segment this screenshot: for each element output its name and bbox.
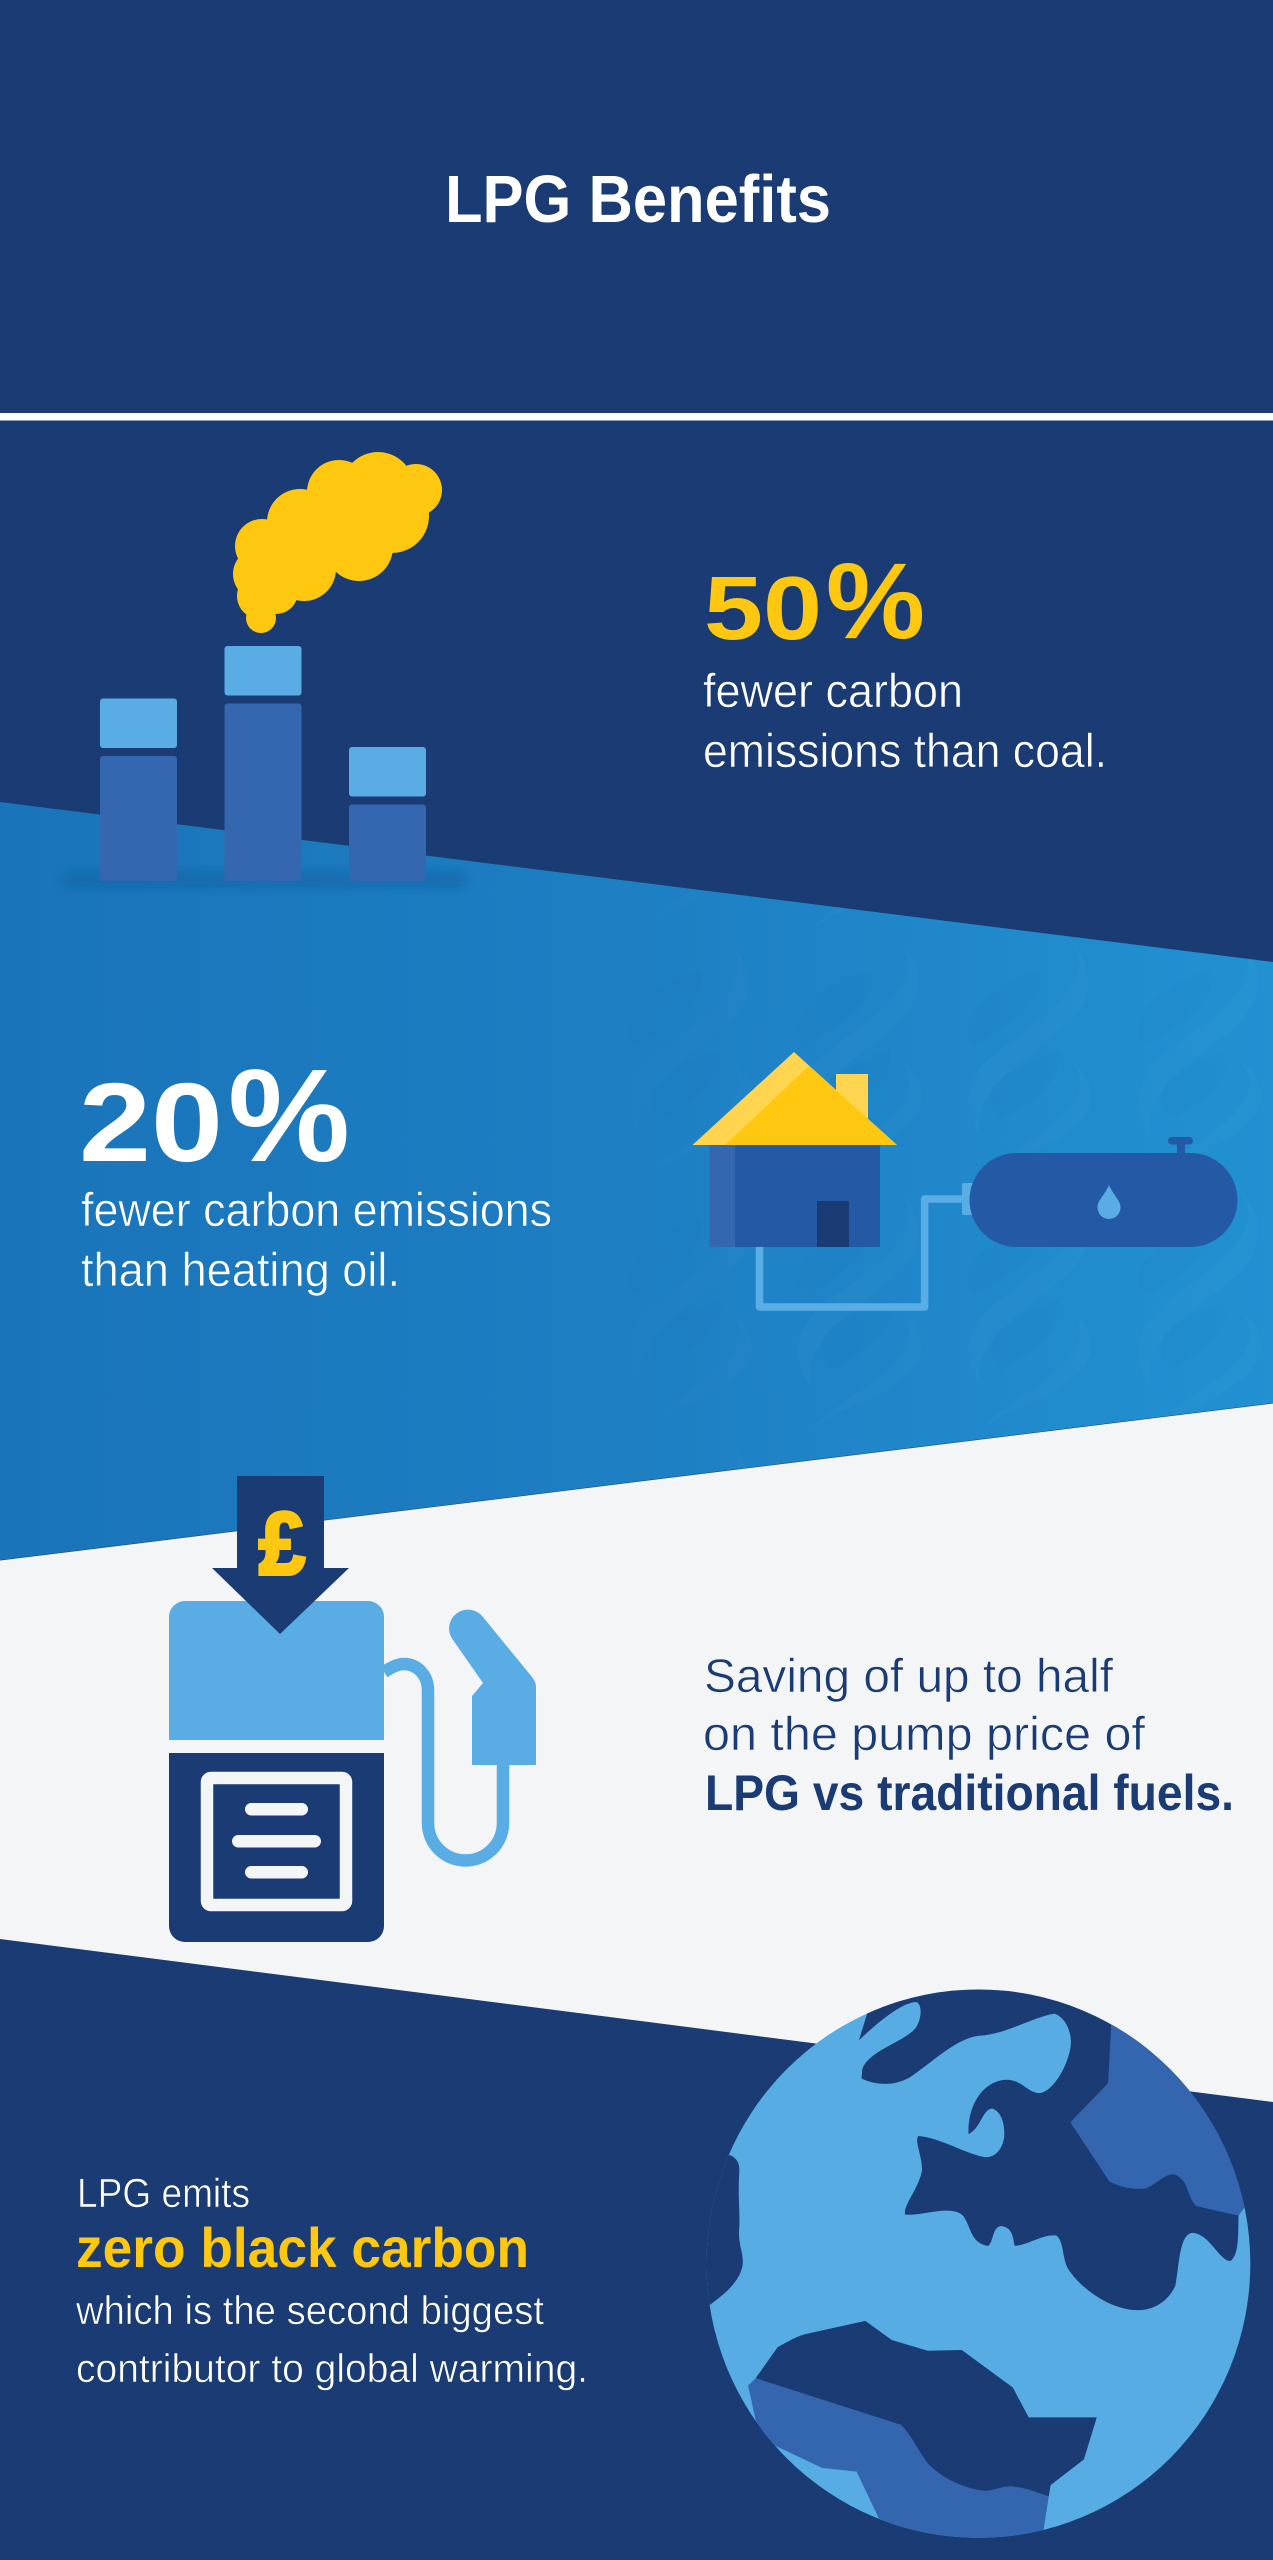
pipe bbox=[760, 1199, 967, 1307]
hose bbox=[384, 1664, 503, 1860]
caption: second biggest contributor bbox=[75, 2289, 588, 2391]
pump base bbox=[169, 1753, 384, 1942]
text block: pump price saving: Saving of up to half bbox=[704, 1649, 1114, 1702]
icon: house connected to LPG tank bbox=[692, 1052, 1238, 1307]
text block: pump price saving: on the pump price of bbox=[703, 1707, 1146, 1760]
caption: fewer carbon emissions than coal: fewer carbon bbox=[703, 664, 963, 717]
stat: 50%: % bbox=[826, 540, 925, 661]
highlight: zero black carbon: zero black carbon bbox=[76, 2216, 529, 2279]
stat: 50%: 50 bbox=[704, 559, 822, 659]
text block: zero black carbon bbox=[75, 2170, 588, 2391]
pump screen bbox=[207, 1778, 346, 1905]
globe land bbox=[706, 1989, 1250, 2538]
smoke cloud bbox=[233, 452, 442, 633]
text block: pump price saving: LPG vs traditional fuels. bbox=[705, 1765, 1234, 1821]
pump top bbox=[169, 1601, 384, 1740]
caption: second biggest contributor: contributor to global warming. bbox=[76, 2347, 588, 2391]
nozzle bbox=[449, 1610, 536, 1765]
caption: fewer carbon emissions than heating oil: than heating oil. bbox=[81, 1243, 400, 1296]
icon: chimneys with smoke bbox=[64, 452, 466, 885]
icon: globe bbox=[706, 1990, 1250, 2538]
text block: 50 percent bbox=[703, 540, 1107, 777]
house door bbox=[817, 1201, 849, 1247]
south ocean bbox=[756, 2321, 1097, 2497]
house roof bbox=[692, 1052, 897, 1145]
price down arrow bbox=[212, 1476, 349, 1634]
pipe valve bbox=[962, 1183, 976, 1215]
text block: pump price saving bbox=[703, 1649, 1234, 1821]
caption: fewer carbon emissions than heating oil bbox=[81, 1183, 552, 1296]
caption: fewer carbon emissions than coal: emissions than coal. bbox=[703, 724, 1107, 777]
icon: fuel pump bbox=[169, 1476, 536, 1942]
title: LPG Benefits bbox=[445, 162, 831, 237]
south shallow sea bbox=[748, 2378, 1049, 2538]
middle chimney bbox=[224, 646, 302, 881]
text block: 20 percent bbox=[79, 1042, 552, 1296]
intro: LPG emits: LPG emits bbox=[77, 2170, 250, 2216]
panel: light band bbox=[0, 1404, 1273, 2102]
west ocean bbox=[706, 2154, 743, 2305]
white divider below title bbox=[0, 413, 1273, 420]
caption: fewer carbon emissions than heating oil: fewer carbon emissions bbox=[81, 1183, 552, 1236]
house body bbox=[710, 1145, 880, 1247]
fuel drop bbox=[1098, 1185, 1120, 1219]
north east shallow sea bbox=[1070, 2024, 1244, 2216]
stat: 50% bbox=[704, 540, 925, 661]
right chimney bbox=[349, 747, 426, 881]
pound sign: £ bbox=[259, 1494, 305, 1593]
left chimney bbox=[100, 698, 177, 881]
house chimney bbox=[836, 1074, 868, 1124]
stat: 20%: % bbox=[228, 1042, 350, 1189]
caption: second biggest contributor: which is the second biggest bbox=[75, 2289, 544, 2333]
north ocean bbox=[859, 1990, 1244, 2310]
chimney ground shadow bbox=[64, 874, 466, 885]
tank bbox=[970, 1137, 1238, 1247]
stat: 20% bbox=[79, 1042, 350, 1189]
caption: fewer carbon emissions than coal bbox=[703, 664, 1107, 777]
stat: 20%: 20 bbox=[79, 1060, 223, 1185]
panel: blue band bbox=[0, 800, 1273, 1600]
